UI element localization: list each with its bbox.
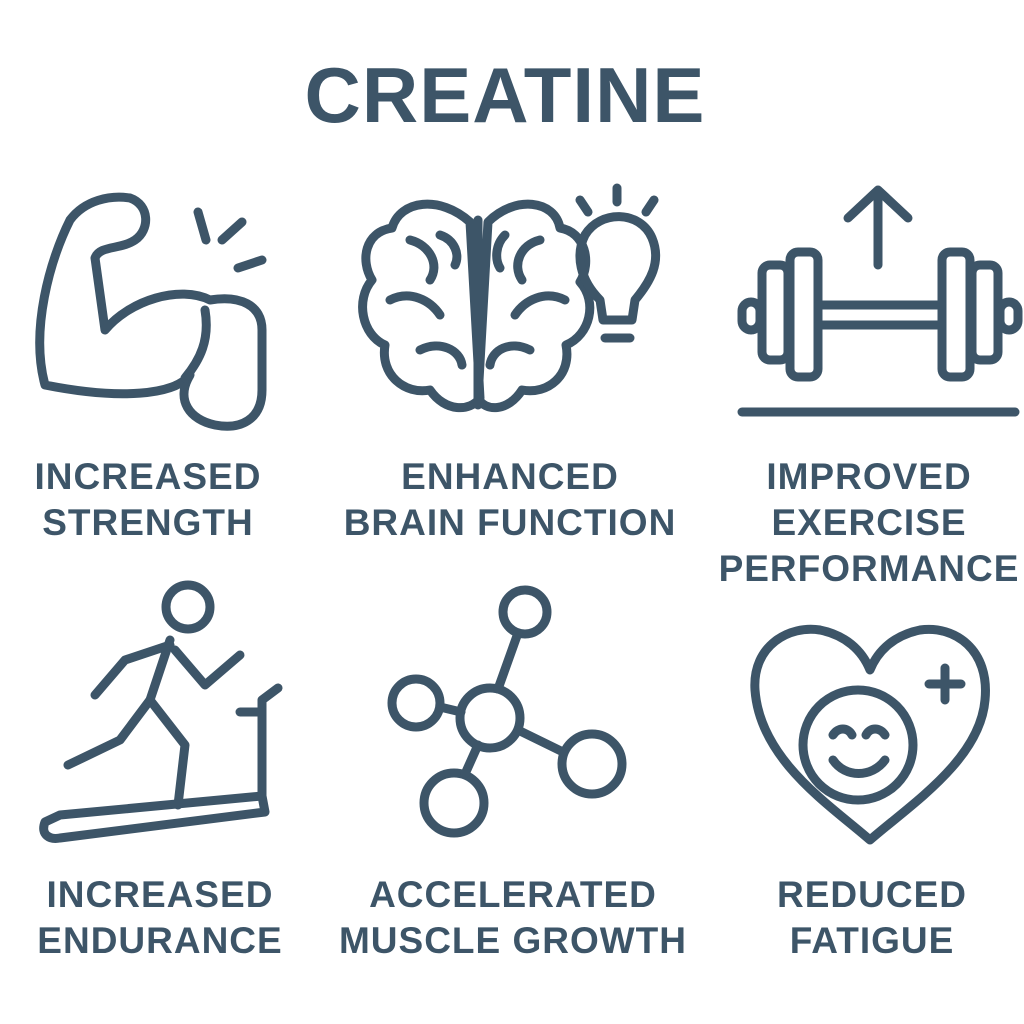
icon: brain [363,204,590,408]
icon: molecule [392,590,622,833]
label: enhanced brain function: ENHANCED [401,456,619,497]
label: improved exercise performance [719,456,1019,589]
label: enhanced brain function [344,456,676,543]
icon: flexed arm [40,197,262,426]
label: accelerated muscle growth [339,874,687,961]
label: reduced fatigue: FATIGUE [790,920,954,961]
label: improved exercise performance: EXERCISE [771,502,967,543]
icon: heart with smile [755,629,985,840]
label: accelerated muscle growth: MUSCLE GROWTH [339,920,687,961]
title: CREATINE [305,51,705,139]
label: increased endurance: ENDURANCE [37,920,283,961]
icon: dumbbell [742,190,1018,412]
label: reduced fatigue: REDUCED [777,874,967,915]
label: enhanced brain function: BRAIN FUNCTION [344,502,676,543]
label: accelerated muscle growth: ACCELERATED [369,874,657,915]
label: increased strength: INCREASED [35,456,261,497]
icon: lightbulb [580,188,656,338]
label: increased strength: STRENGTH [42,502,254,543]
label: reduced fatigue [777,874,967,961]
label: improved exercise performance: PERFORMANCE [719,548,1019,589]
label: increased endurance: INCREASED [47,874,273,915]
label: increased endurance [37,874,283,961]
icon: runner on treadmill [44,585,278,838]
label: improved exercise performance: IMPROVED [766,456,972,497]
label: increased strength [35,456,261,543]
